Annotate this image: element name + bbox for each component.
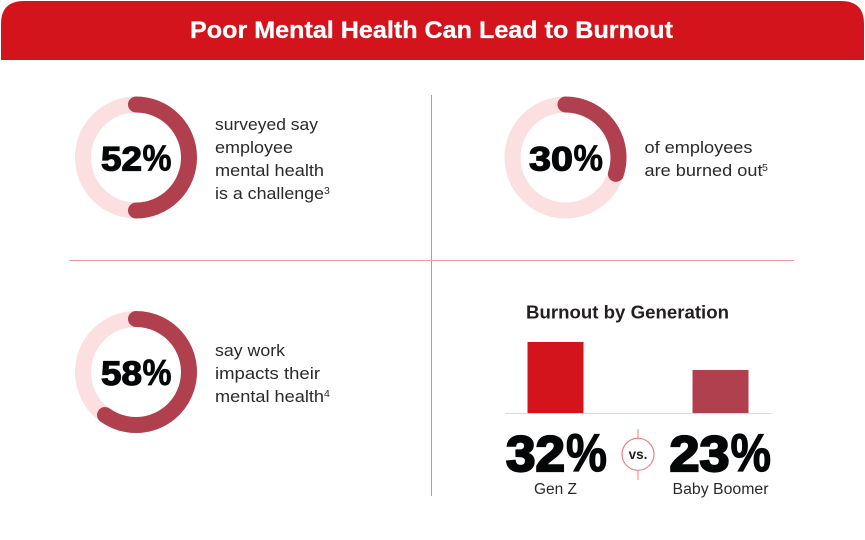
text: 30% description: 5 — [762, 162, 768, 174]
stat: Gen Z 32%: 32 — [506, 426, 565, 482]
panel: 58% stat — [83, 319, 330, 425]
vs. badge: vs. — [629, 447, 647, 462]
stat: Baby Boomer 23% — [670, 424, 771, 498]
text: 58% description: say work — [215, 341, 286, 360]
donut chart: 30%: 30 — [529, 140, 573, 178]
text: 52% description: mental health — [215, 161, 324, 180]
donut chart: 52%: % — [142, 138, 172, 178]
text: 52% description: surveyed say — [215, 115, 318, 134]
text: 58% description: impacts their — [215, 364, 320, 383]
stat: Gen Z 32% — [506, 424, 607, 498]
title banner: Poor Mental Health Can Lead to Burnout — [190, 17, 673, 44]
donut chart: 58%: 58 — [101, 355, 142, 393]
donut chart: 52% — [83, 104, 189, 210]
heading: Burnout by Generation — [526, 302, 729, 322]
donut chart: 58% — [83, 319, 189, 425]
vs. badge — [622, 429, 654, 480]
panel: 30% stat — [512, 104, 768, 210]
text: 52% description: 3 — [324, 185, 330, 197]
text: 58% description: 4 — [324, 388, 330, 400]
text: 30% description: of employees — [644, 138, 752, 157]
title banner — [1, 1, 864, 60]
stat: Gen Z 32%: % — [566, 424, 607, 483]
stat: Baby Boomer 23%: 23 — [670, 426, 730, 482]
stat: Baby Boomer 23%: % — [730, 424, 771, 483]
text: 52% description: employee — [215, 138, 293, 157]
text: 52% description: is a challenge — [215, 184, 324, 203]
donut chart: 30% — [512, 104, 619, 210]
panel: 52% stat — [83, 104, 330, 210]
text: 30% description: are burned out — [644, 161, 763, 180]
donut chart: 30%: % — [574, 138, 603, 178]
donut chart: 58%: % — [142, 352, 172, 393]
stat: Gen Z 32%: Gen Z — [534, 481, 577, 498]
donut chart: 52%: 52 — [101, 140, 142, 178]
bar chart — [505, 342, 771, 414]
text: 58% description: mental health — [215, 387, 324, 406]
stat: Baby Boomer 23%: Baby Boomer — [672, 481, 768, 498]
panel: burnout by generation — [505, 302, 771, 498]
